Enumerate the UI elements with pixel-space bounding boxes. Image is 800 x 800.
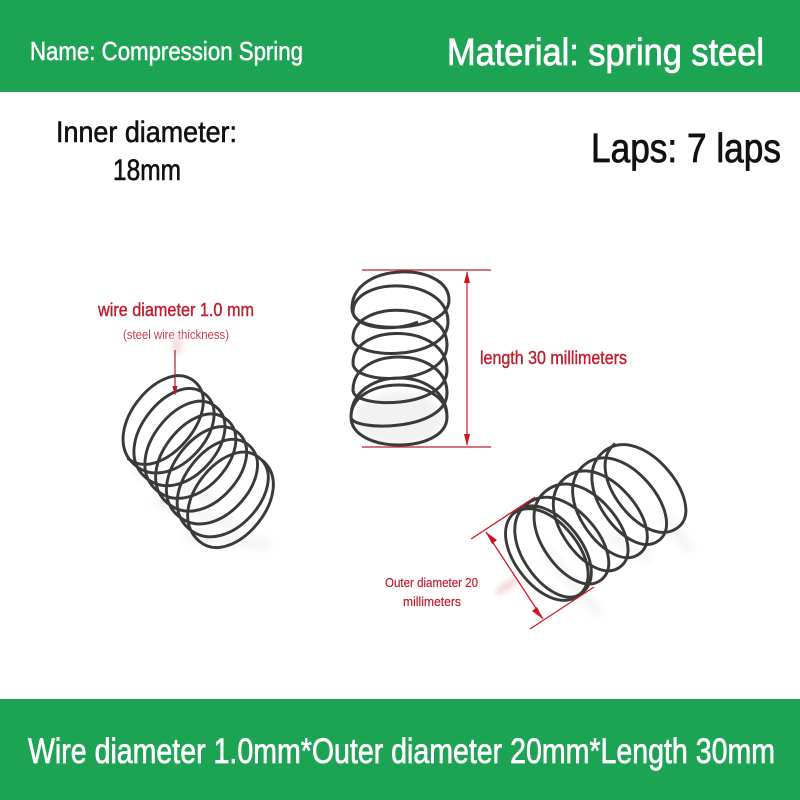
dimension: length 30 [362,270,491,447]
wire diameter label [97,300,254,342]
outer diameter label: millimeters [403,594,461,609]
arrow: wire diameter [172,335,182,396]
material heading: Material: spring steel [447,32,764,74]
top banner [0,0,800,92]
outer diameter label: Outer diameter 20 [385,575,478,590]
inner diameter text: 18mm [113,154,181,187]
length label: length 30 millimeters [480,348,627,368]
right spring [489,422,700,621]
dimension: outer diameter [471,497,594,629]
product name: Name: Compression Spring [30,36,303,66]
inner diameter text: Inner diameter: [56,116,237,149]
outer diameter label [385,575,478,609]
left spring [94,362,301,563]
inner diameter text [56,116,237,187]
wire diameter label: wire diameter 1.0 mm [97,300,254,320]
bottom banner [0,699,800,800]
middle spring [351,272,449,445]
wire diameter label: (steel wire thickness) [123,327,229,342]
